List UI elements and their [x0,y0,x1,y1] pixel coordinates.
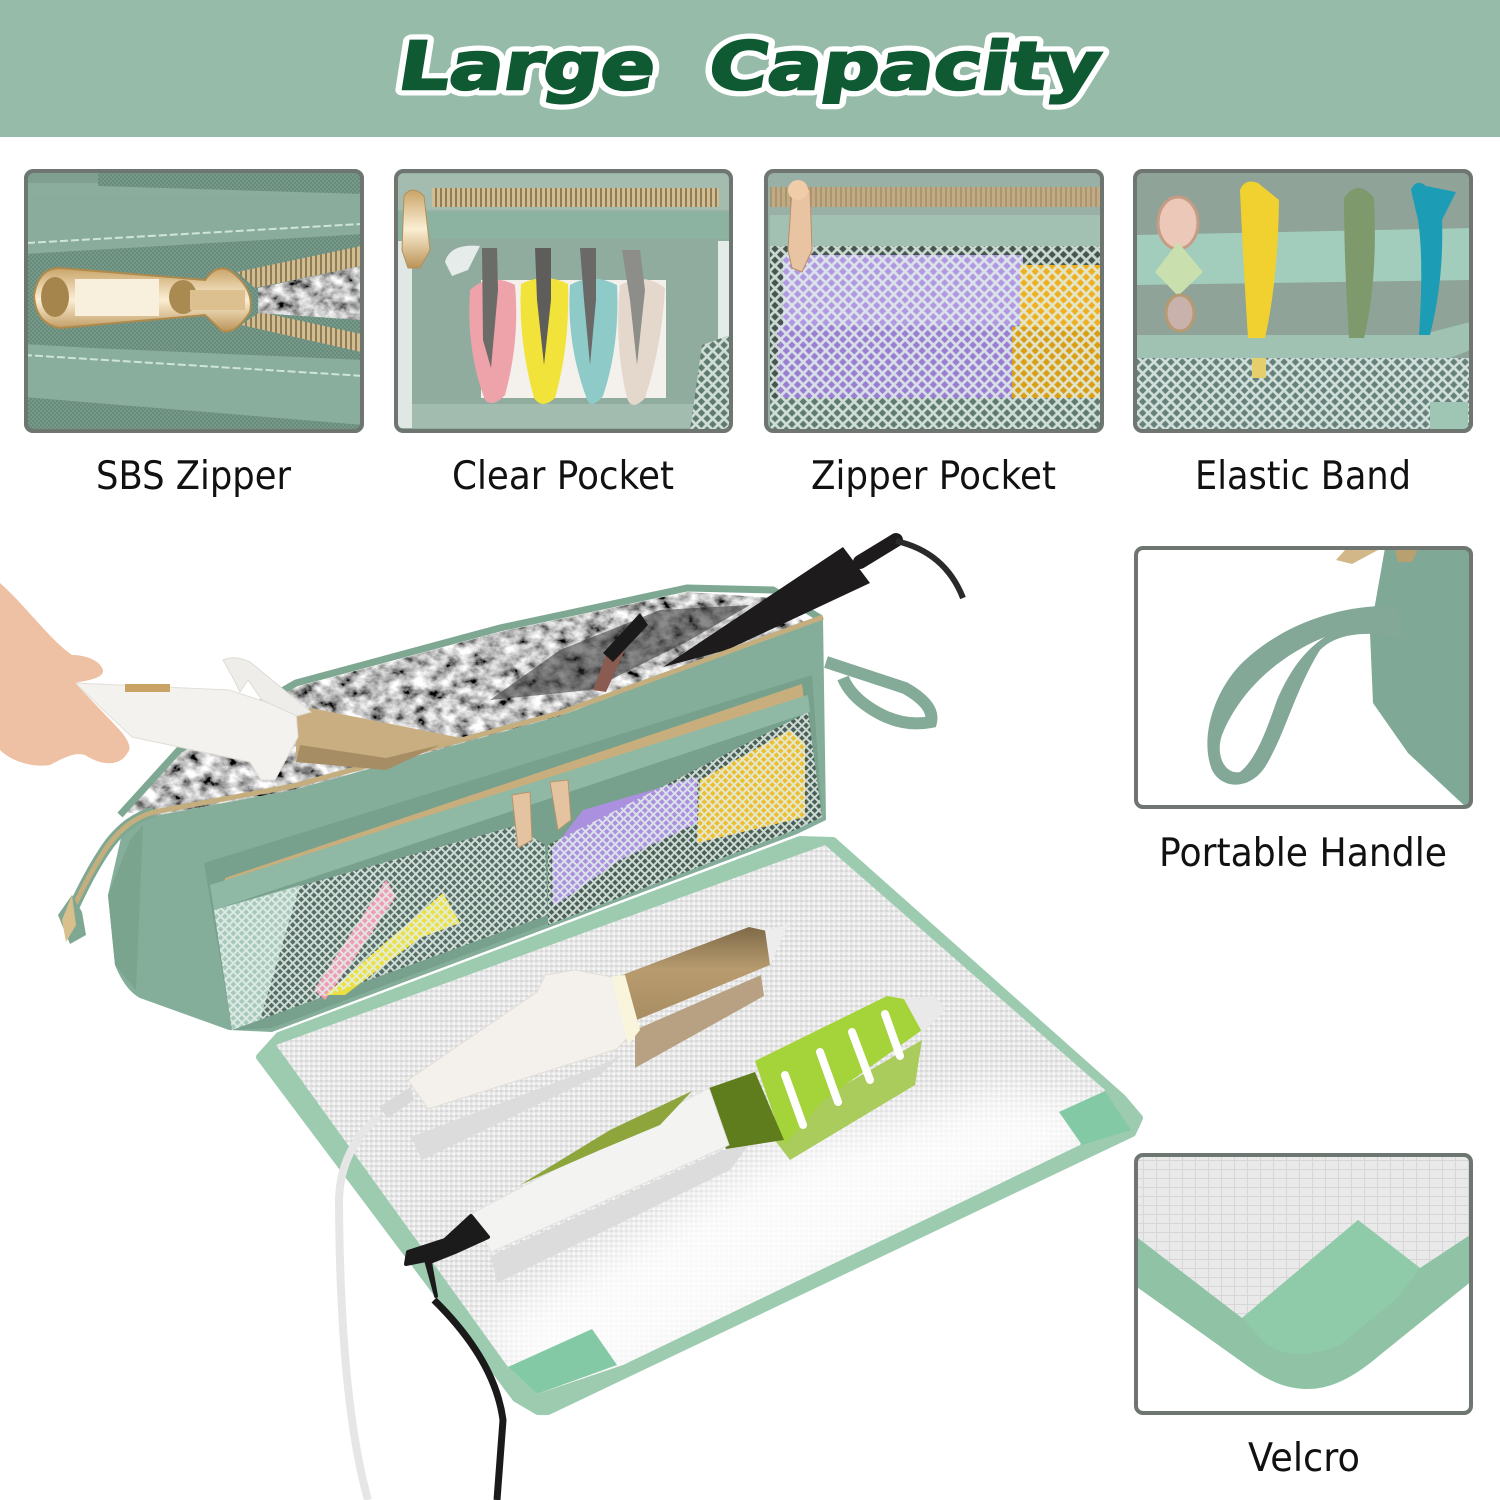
bag front body [108,618,826,1032]
label: Elastic Band: Elastic Band [1195,454,1411,499]
clamp inside bag [593,613,648,692]
left mesh pocket [214,826,548,1030]
hand holding curling iron [0,583,129,766]
gold curling iron on flap [379,925,788,1160]
label: SBS Zipper: SBS Zipper [96,454,292,499]
title [393,27,1107,105]
label: Velcro: Velcro [1248,1436,1360,1481]
label: Portable Handle: Portable Handle [1159,831,1447,876]
panel: SBS zipper [24,169,364,433]
label: Zipper Pocket: Zipper Pocket [811,454,1056,499]
right mesh pocket [548,712,822,925]
left side zipper pull [58,895,86,944]
title: Large [393,27,662,105]
handle loop [826,662,931,723]
main zipper [66,617,823,925]
side panel shade [108,825,143,990]
green curling iron on flap [406,996,945,1296]
panel: velcro [1134,1153,1473,1415]
main bag illustration [0,540,1139,1500]
label: Clear Pocket: Clear Pocket [452,454,674,499]
fold-out flap [260,840,1139,1411]
title banner [0,0,1500,137]
velcro tabs [1059,1091,1131,1145]
title: Capacity [703,27,1107,105]
white curling iron in hand [75,658,461,780]
pocket zipper pulls [512,780,571,848]
title: Large [393,27,662,105]
pocket flap and zipper [204,675,822,1030]
panel: clear pocket [394,169,733,433]
foil lining of bag opening [120,588,820,816]
power cords [339,1116,379,1500]
title: Capacity [703,27,1107,105]
panel: elastic band [1133,169,1473,433]
black curling wand [663,540,963,667]
panel: portable handle [1134,546,1473,809]
panel: zipper pocket [764,169,1104,433]
